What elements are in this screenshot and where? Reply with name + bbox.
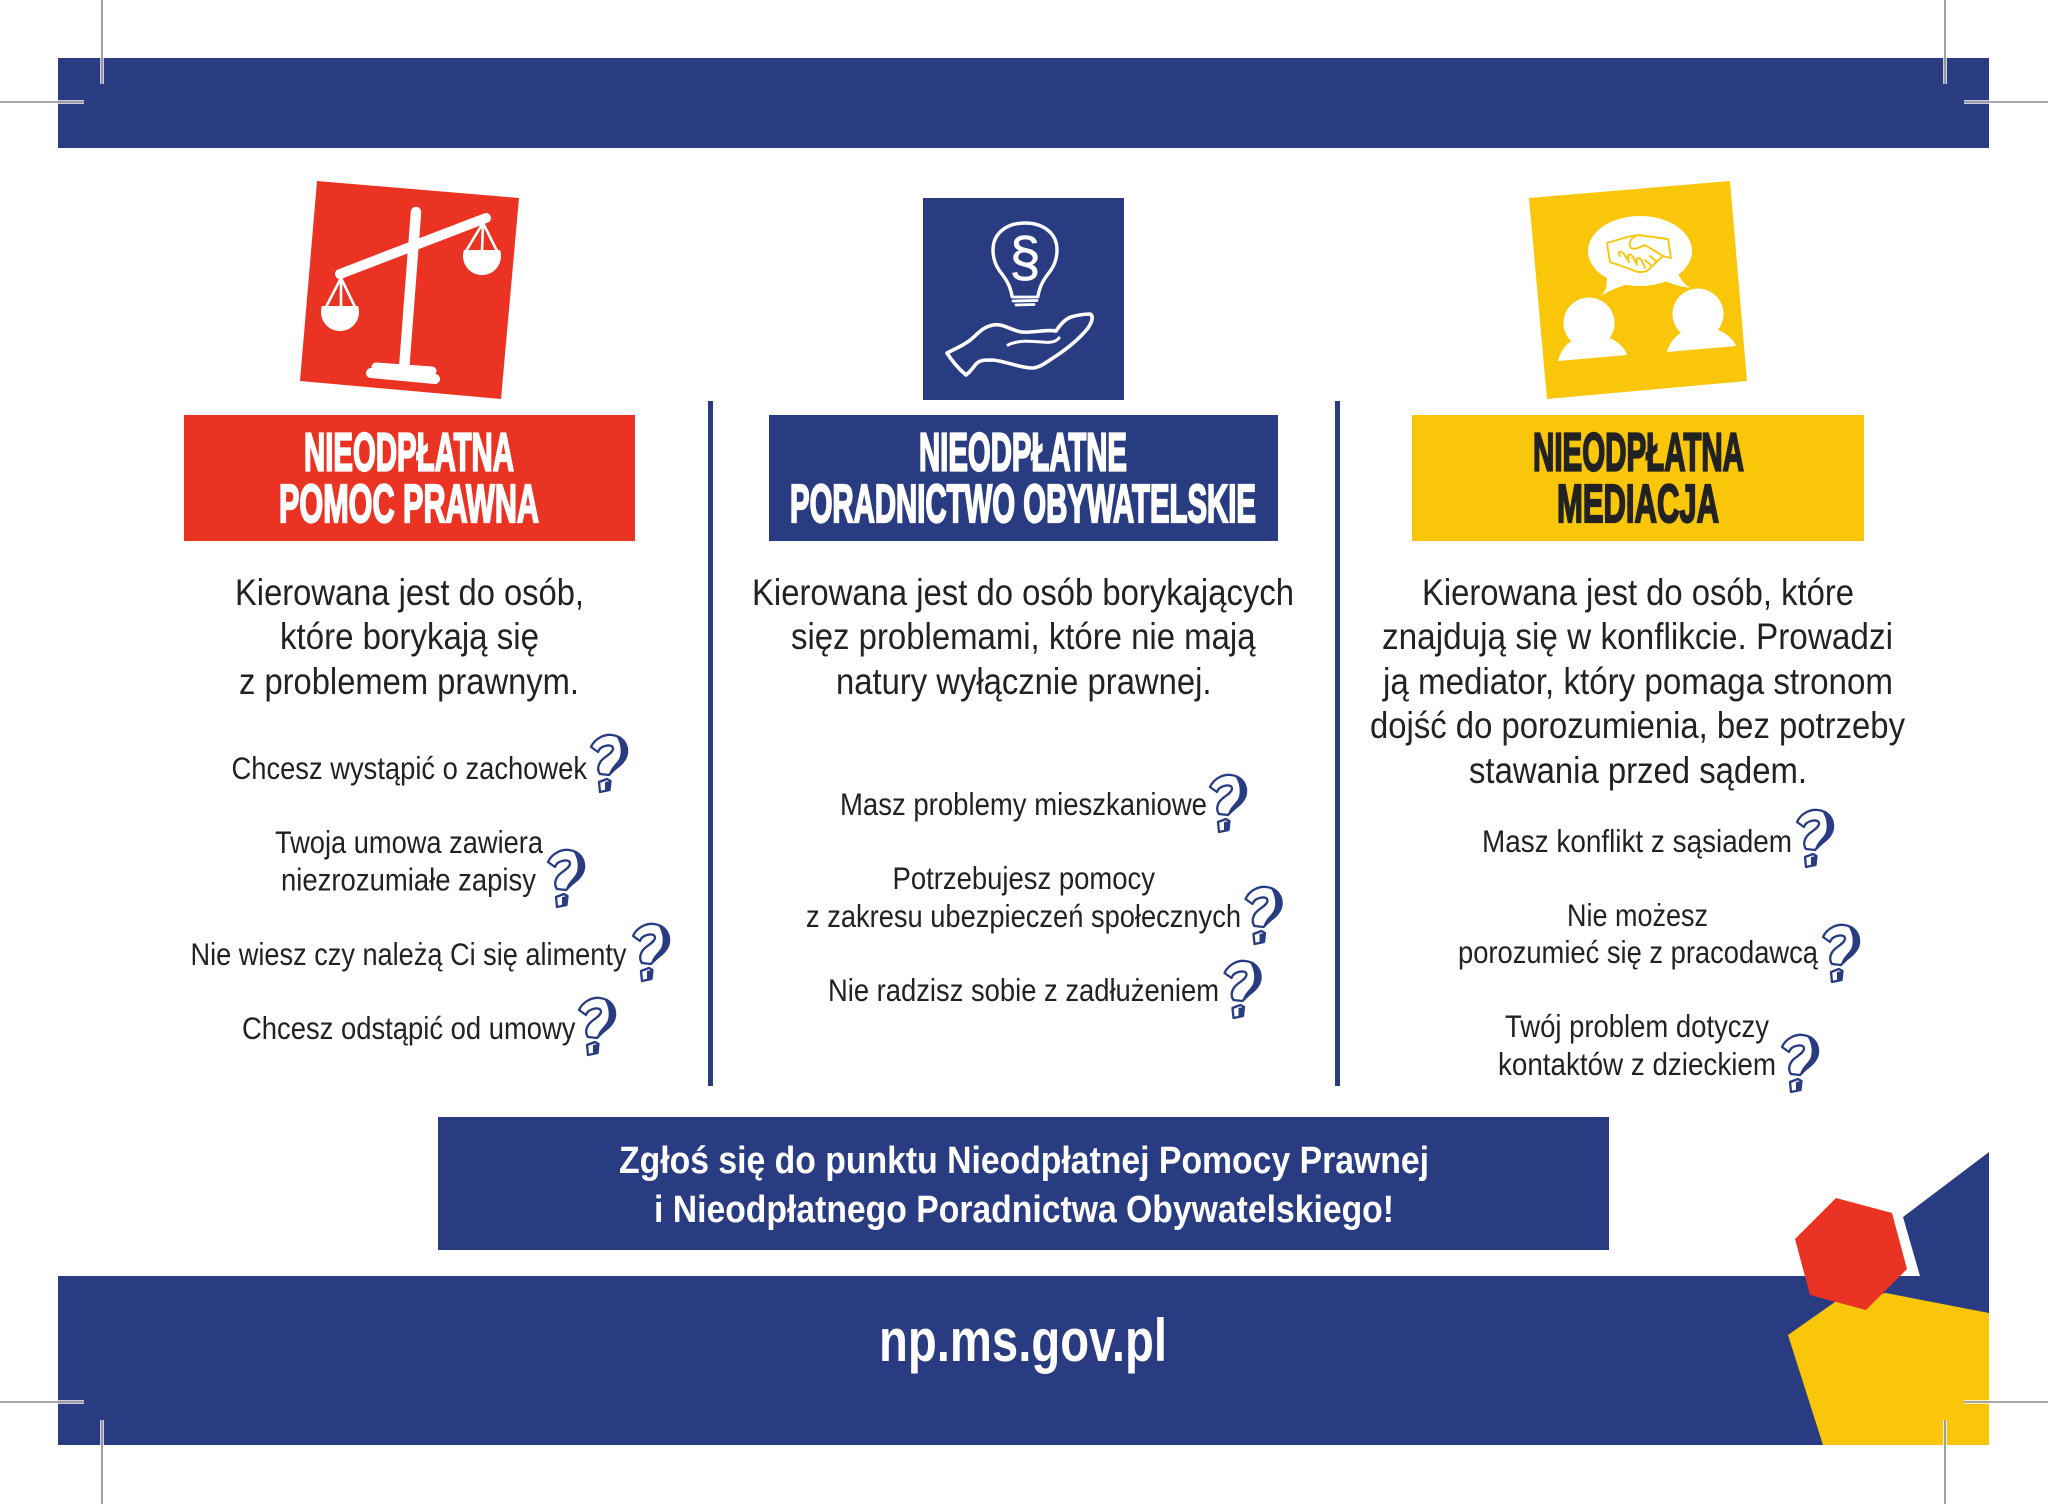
question: ubezpieczenia: Potrzebujesz pomocy (892, 860, 1155, 896)
question: umowa: niezrozumiałe zapisy (281, 862, 536, 898)
description text: znajdują się w konflikcie. Prowadzi (1382, 615, 1893, 657)
question: mieszkaniowe (840, 775, 1246, 832)
question: kontakty z dzieckiem: kontaktów z dzieckiem (1498, 1046, 1776, 1082)
description text (235, 571, 584, 702)
question: pracodawca (1458, 897, 1859, 982)
question: umowa (275, 824, 584, 907)
description text: ją mediator, który pomaga stronom (1382, 660, 1893, 702)
description text: dojść do porozumienia, bez potrzeby (1370, 704, 1905, 746)
icon: light bulb over hand on blue square: § (1009, 225, 1041, 288)
top blue bar (58, 58, 1989, 148)
question: zachowek (232, 735, 627, 792)
description text: z problemem prawnym. (239, 660, 579, 702)
heading: pomoc prawna (184, 415, 635, 541)
column dividers (708, 401, 1340, 1086)
question: alimenty: Nie wiesz czy należą Ci się alimenty (190, 936, 627, 972)
question: odstąpić od umowy (242, 998, 615, 1055)
description text (752, 571, 1294, 702)
heading: pomoc prawna: POMOC PRAWNA (279, 474, 539, 534)
question: kontakty z dzieckiem: Twój problem dotyczy (1505, 1008, 1769, 1044)
heading: mediacja: NIEODPŁATNA (1533, 422, 1744, 482)
question: ubezpieczenia: z zakresu ubezpieczeń społecznych (806, 898, 1241, 934)
description text: Kierowana jest do osób borykających (752, 571, 1294, 613)
description text: sięz problemami, które nie mają (791, 615, 1256, 657)
panel: nieodpłatna pomoc prawna (184, 181, 669, 1055)
callout: call to action: Zgłoś się do punktu Nieodpłatnej Pomocy Prawnej (619, 1140, 1429, 1182)
description text: natury wyłącznie prawnej. (836, 660, 1212, 702)
question: zadłużenie: Nie radzisz sobie z zadłużeniem (828, 972, 1219, 1008)
question: pracodawca: Nie możesz (1567, 897, 1708, 933)
panel: nieodpłatna mediacja (1370, 181, 1905, 1092)
question: alimenty (190, 924, 669, 981)
question: kontakty z dzieckiem (1498, 1008, 1818, 1092)
icon: two people with handshake speech bubble on yellow square (1529, 181, 1747, 399)
heading: poradnictwo obywatelskie: PORADNICTWO OBYWATELSKIE (790, 474, 1256, 534)
description text: Kierowana jest do osób, które (1422, 571, 1854, 613)
icon: scales on red square (300, 181, 519, 399)
description text: które borykają się (280, 615, 539, 657)
question: umowa: Twoja umowa zawiera (275, 824, 543, 860)
panel: nieodpłatne poradnictwo obywatelskie (752, 198, 1294, 1018)
question: sąsiad: Masz konflikt z sąsiadem (1482, 823, 1792, 859)
question: mieszkaniowe: Masz problemy mieszkaniowe (840, 786, 1207, 822)
decorative corner shapes (1788, 1152, 1989, 1445)
callout: call to action: i Nieodpłatnego Poradnictwa Obywatelskiego! (654, 1189, 1394, 1231)
description text: Kierowana jest do osób, (235, 571, 584, 613)
question: sąsiad (1482, 810, 1833, 867)
heading: poradnictwo obywatelskie (769, 415, 1278, 541)
description text: stawania przed sądem. (1469, 749, 1807, 791)
heading: mediacja (1412, 415, 1864, 541)
callout: call to action (438, 1117, 1609, 1250)
heading: poradnictwo obywatelskie: NIEODPŁATNE (919, 422, 1127, 482)
question: pracodawca: porozumieć się z pracodawcą (1458, 934, 1818, 970)
question: zachowek: Chcesz wystąpić o zachowek (232, 750, 587, 786)
description text (1370, 571, 1905, 791)
heading: pomoc prawna: NIEODPŁATNA (304, 422, 514, 482)
icon: light bulb over hand on blue square (923, 198, 1124, 400)
heading: mediacja: MEDIACJA (1557, 474, 1719, 534)
bottom blue bar (58, 1276, 1989, 1445)
website address: np.ms.gov.pl (879, 1307, 1167, 1374)
question: zadłużenie (828, 961, 1261, 1018)
question: odstąpić od umowy: Chcesz odstąpić od umowy (242, 1010, 576, 1046)
question: ubezpieczenia (806, 860, 1282, 944)
